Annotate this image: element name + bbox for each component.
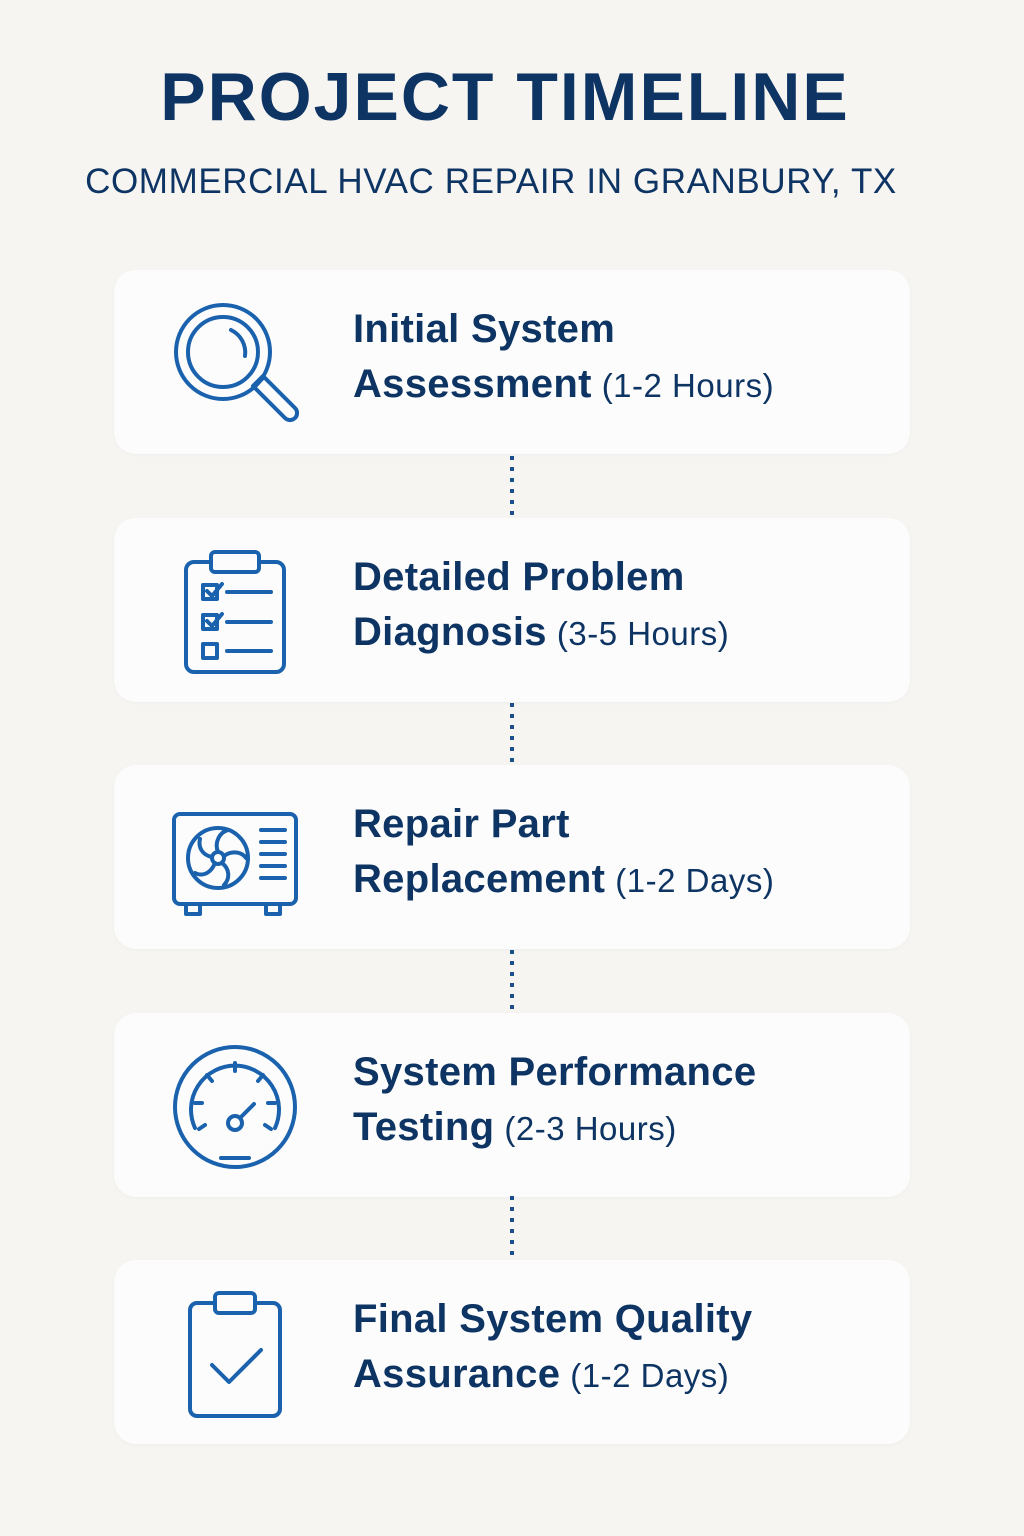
connector [510,456,514,518]
card: step 1 [114,270,910,454]
text: Initial System [353,307,615,351]
text [353,307,774,406]
text [353,555,729,654]
title: PROJECT TIMELINE [160,59,850,135]
icon: HVAC unit [172,812,298,916]
card: step 3 [114,765,910,949]
text: Final System Quality [353,1297,752,1341]
text: Assurance (1-2 Days) [353,1352,729,1396]
text: Repair Part [353,802,570,846]
card: step 5 [114,1260,910,1444]
connector [510,950,514,1012]
text: Assessment (1-2 Hours) [353,362,774,406]
icon: gauge [173,1045,297,1169]
icon: clipboard check [188,1291,282,1418]
text [353,1297,752,1396]
subtitle: COMMERCIAL HVAC REPAIR IN GRANBURY, TX [85,162,897,201]
text [353,802,774,901]
connector [510,1196,514,1258]
card: step 4 [114,1013,910,1197]
text: Replacement (1-2 Days) [353,857,774,901]
text: System Performance [353,1050,756,1094]
card: step 2 [114,518,910,702]
connector [510,703,514,765]
text [353,1050,756,1149]
text: Testing (2-3 Hours) [353,1105,677,1149]
icon: checklist [184,550,286,674]
icon: magnifying glass [174,303,299,422]
text: Detailed Problem [353,555,685,599]
text: Diagnosis (3-5 Hours) [353,610,729,654]
